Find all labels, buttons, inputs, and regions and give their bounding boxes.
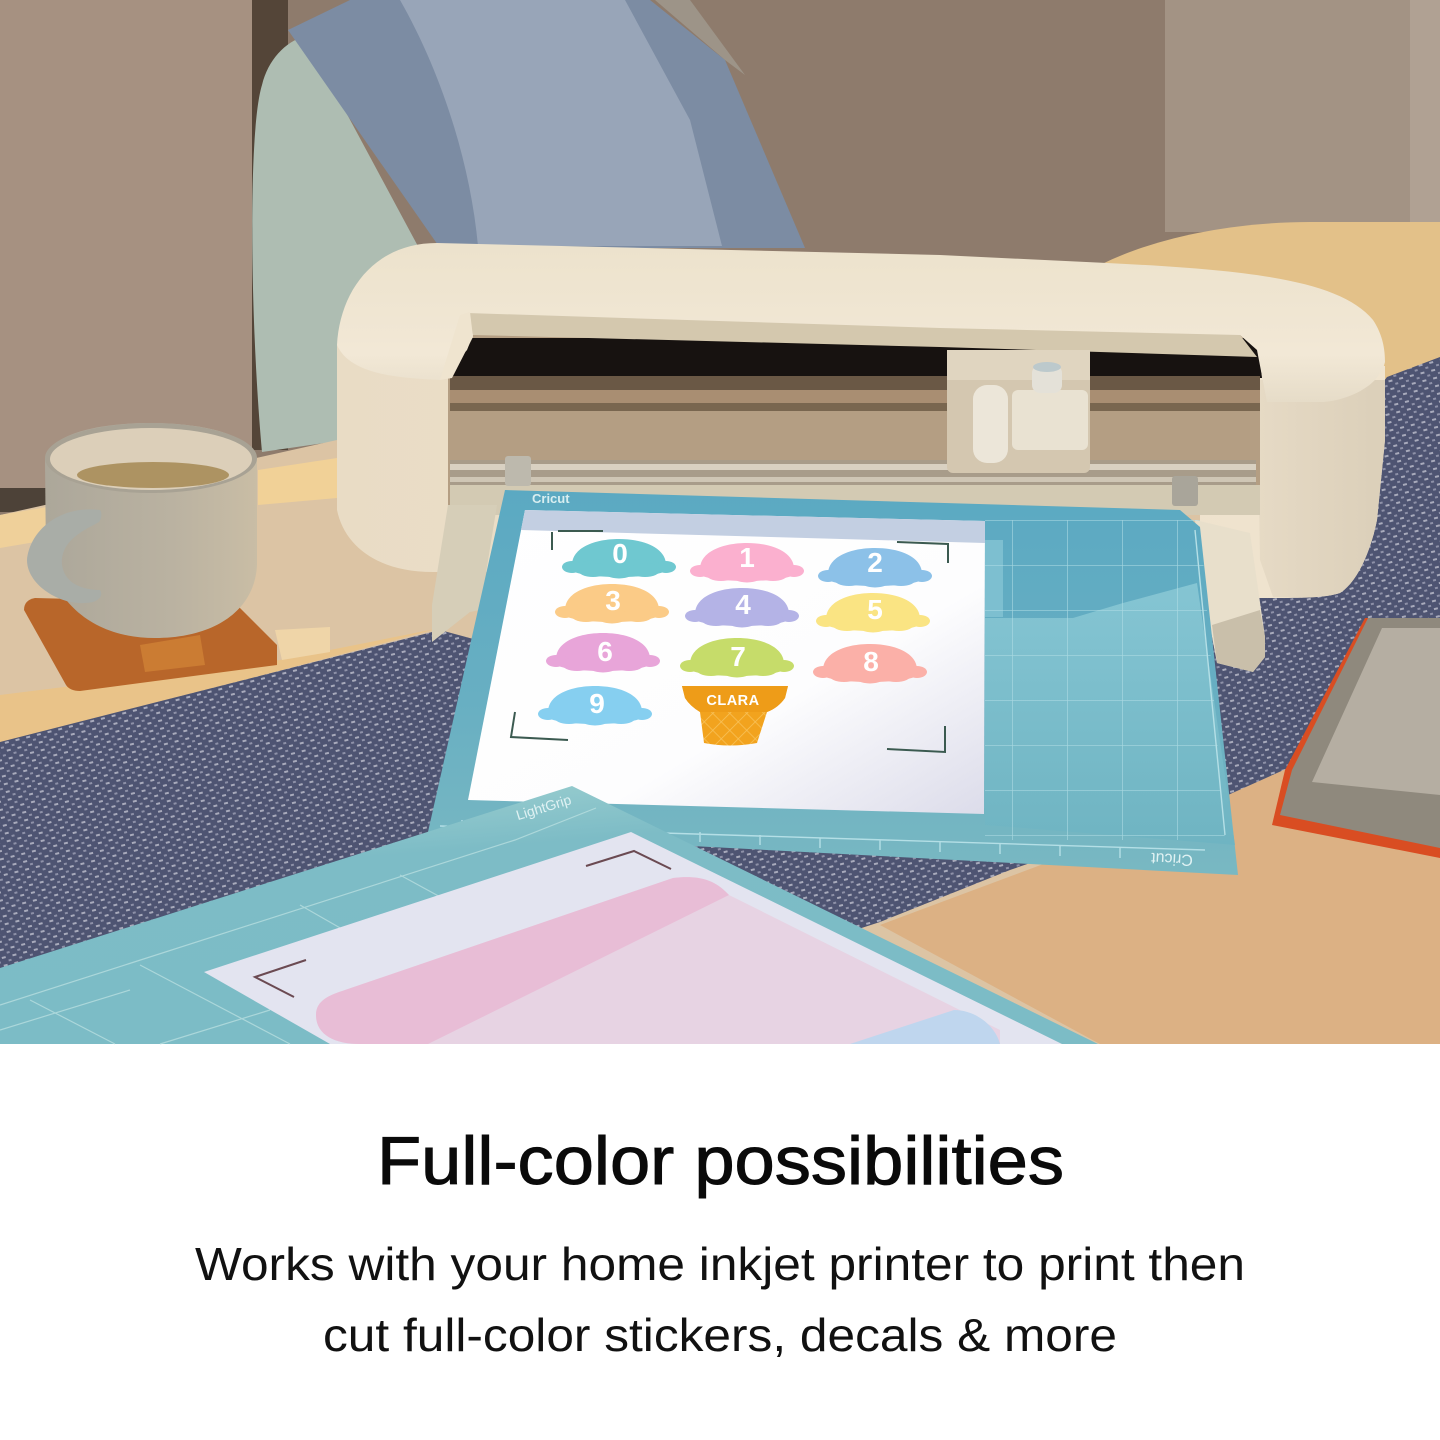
grid lines — [0, 808, 596, 1044]
mug handle — [27, 509, 101, 603]
printed sticker sheet — [468, 510, 985, 814]
panel: product photo — [0, 0, 1440, 1044]
blue cutting mat — [428, 490, 1238, 875]
mat brand label: Cricut — [1150, 849, 1193, 868]
scoop 7 — [680, 638, 794, 678]
machine lid — [337, 243, 1385, 402]
scoop 9 — [538, 686, 652, 726]
mat brand label: LightGrip — [514, 791, 573, 823]
scoop 3 — [555, 584, 669, 624]
mug — [27, 423, 257, 638]
grid lines — [985, 520, 1225, 840]
scoop 6 — [546, 633, 660, 672]
scoop 8: 8 — [863, 646, 879, 677]
sunlit area of mat — [985, 583, 1235, 845]
description text: Works with your home inkjet printer to print then — [195, 1238, 1245, 1290]
registration marks — [511, 531, 948, 752]
chair — [252, 0, 745, 452]
mat brand label: Cricut — [532, 491, 570, 506]
scoop 3: 3 — [605, 585, 621, 616]
scoop 2: 2 — [867, 547, 883, 578]
description text: cut full-color stickers, decals & more — [323, 1309, 1117, 1361]
scoop 0: 0 — [612, 538, 628, 569]
cutting machine — [337, 243, 1385, 672]
heading: Full-color possibilities — [377, 1123, 1064, 1199]
wooden table — [0, 222, 1440, 1044]
ice cream scoops — [538, 538, 932, 726]
lid lip — [467, 313, 1257, 357]
scoop 8 — [813, 644, 927, 684]
scoop 9: 9 — [589, 688, 605, 719]
background wall — [0, 0, 1440, 520]
scoop 7: 7 — [730, 641, 746, 672]
second cutting mat — [0, 786, 1098, 1044]
scoop 6: 6 — [597, 636, 613, 667]
ruler ticks — [440, 530, 1225, 858]
coaster — [24, 598, 277, 691]
scoop 4: 4 — [735, 589, 751, 620]
blanket on chair — [288, 0, 805, 248]
registration marks — [255, 851, 671, 997]
scoop 1: 1 — [739, 542, 755, 573]
right mat guide — [1195, 520, 1265, 672]
left mat guide — [432, 505, 497, 642]
scoop 5 — [816, 593, 930, 632]
scoop 0 — [562, 538, 676, 578]
ice cream cone — [682, 686, 788, 746]
scoop 1 — [690, 542, 804, 582]
ice cream cone: CLARA — [706, 693, 760, 709]
table runner — [0, 357, 1440, 1000]
tablet — [1272, 618, 1440, 858]
cutting carriage — [947, 350, 1090, 473]
description text — [195, 1238, 1245, 1361]
printed sheet — [204, 832, 1062, 1044]
scoop 4 — [685, 588, 799, 628]
scoop 5: 5 — [867, 594, 883, 625]
machine body — [337, 345, 1385, 598]
scoop 2 — [818, 547, 932, 588]
machine opening — [448, 335, 1262, 515]
